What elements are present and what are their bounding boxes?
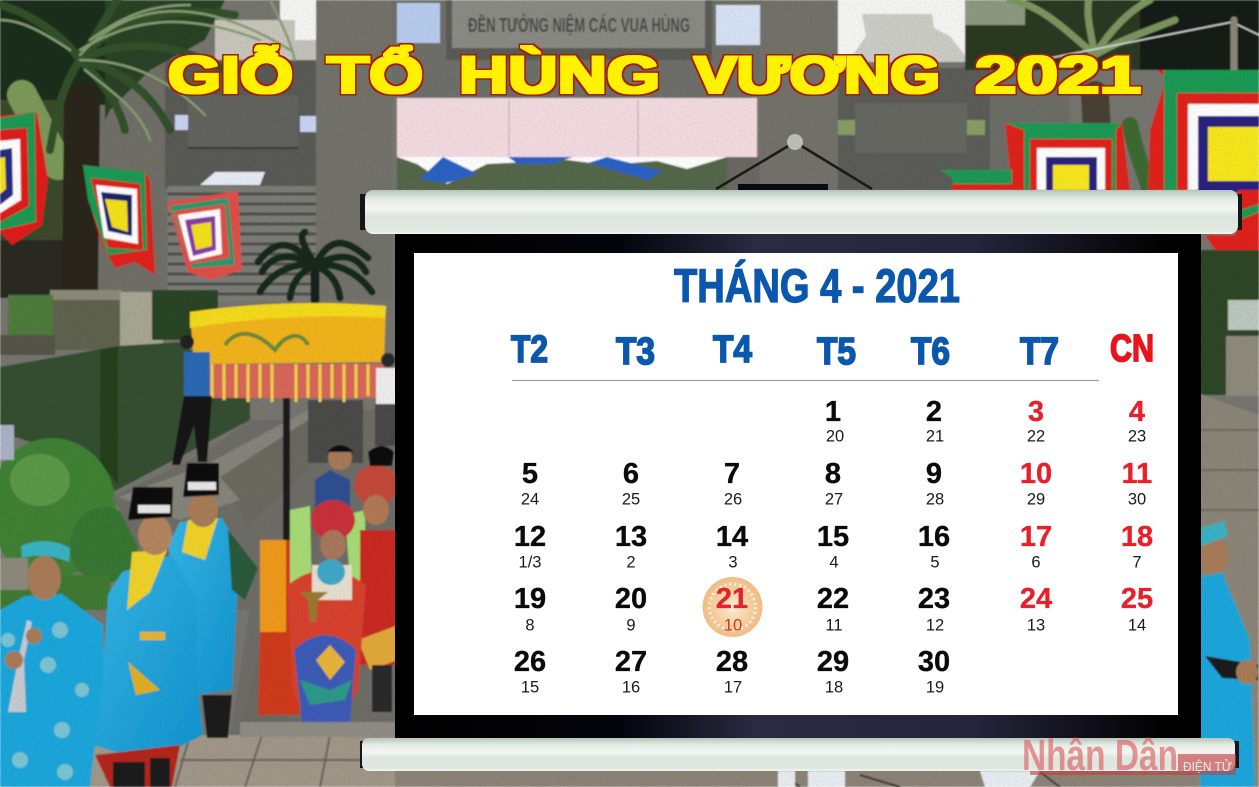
- weekday headers: T3: [616, 331, 655, 373]
- week 3: 12: [514, 521, 546, 553]
- week 1: 23: [1128, 428, 1146, 446]
- weekday headers: T2: [511, 329, 548, 371]
- right wall and garden: [1195, 250, 1259, 787]
- festival flags: [0, 70, 1259, 280]
- watermark: Nhân Dân điện tử: ĐIỆN TỬ: [1183, 759, 1232, 774]
- week 3: 5: [930, 554, 940, 572]
- weekday headers: T4: [713, 329, 752, 371]
- highlighted death anniversary date: 21: [716, 583, 748, 615]
- blue robed man, centre: [92, 487, 203, 787]
- weekday headers: T6: [911, 331, 950, 373]
- week 5: 28: [716, 646, 748, 678]
- week 3: 15: [817, 521, 849, 553]
- week 2: 29: [1027, 491, 1045, 509]
- week 4: 11: [825, 617, 843, 635]
- week 2: 24: [521, 491, 539, 509]
- week 1: 20: [826, 428, 844, 446]
- week 2: 28: [926, 491, 944, 509]
- calendar sheet: [414, 253, 1178, 715]
- week 1: 4: [1129, 396, 1145, 428]
- week 3: 7: [1132, 554, 1142, 572]
- week 5: 19: [926, 679, 944, 697]
- week 1: 21: [926, 428, 944, 446]
- flag right 3: [940, 170, 1012, 190]
- bottom roller: [360, 738, 1239, 771]
- week 5: 18: [825, 679, 843, 697]
- week 4: 8: [525, 617, 535, 635]
- week 4: 25: [1121, 583, 1153, 615]
- week 3: 1/3: [519, 554, 541, 572]
- month heading: THÁNG 4 - 2021: [674, 259, 960, 312]
- week 3: 16: [918, 521, 950, 553]
- day grid: [514, 396, 1153, 697]
- week 3: 4: [829, 554, 839, 572]
- week 3: 14: [716, 521, 748, 553]
- week 4: 23: [918, 583, 950, 615]
- week 4: 19: [514, 583, 546, 615]
- flag left 1: [0, 112, 48, 245]
- palm trees: [0, 0, 1259, 300]
- stone walkway: [0, 400, 1259, 787]
- weekday headers: T5: [817, 331, 856, 373]
- week 4: 20: [615, 583, 647, 615]
- week 2: 7: [724, 458, 740, 490]
- week 1: 1: [825, 396, 841, 428]
- week 2: 30: [1128, 491, 1146, 509]
- title: 2021: [975, 46, 1141, 105]
- sky: [280, 0, 968, 60]
- bystanders: [172, 335, 398, 465]
- week 3: 6: [1031, 554, 1041, 572]
- week 2: 6: [623, 458, 639, 490]
- hedge and garden: [0, 290, 250, 610]
- highlighted death anniversary date: [702, 577, 762, 637]
- week 5: 27: [615, 646, 647, 678]
- stairs: [168, 186, 316, 301]
- flutist in turquoise robe: [0, 541, 103, 787]
- week 2: 9: [926, 458, 942, 490]
- week 2: 10: [1020, 458, 1052, 490]
- week 2: 25: [622, 491, 640, 509]
- week 1: [825, 396, 1146, 446]
- week 3: 17: [1020, 521, 1052, 553]
- flag left 3: [167, 191, 242, 280]
- temple gate: ĐỀN TƯỞNG NIỆM CÁC VUA HÙNG: [468, 13, 690, 37]
- week 2: 5: [522, 458, 538, 490]
- week 2: [521, 458, 1152, 509]
- title: HÙNG: [459, 45, 660, 105]
- week 4: 9: [626, 617, 636, 635]
- week 4: 14: [1128, 617, 1146, 635]
- week 3: 18: [1121, 521, 1153, 553]
- blue robed man, back: [168, 463, 258, 738]
- flag left 2: [83, 165, 155, 275]
- title: GIỖ: [168, 44, 293, 105]
- hanger: [716, 134, 872, 191]
- week 4: 24: [1020, 583, 1052, 615]
- title: [168, 44, 1141, 105]
- highlighted death anniversary date: 10: [724, 617, 742, 635]
- week 4: 22: [817, 583, 849, 615]
- weekday headers: [511, 328, 1154, 373]
- title: TỔ: [327, 45, 423, 105]
- temple gate: [95, 0, 1070, 300]
- week 5: 30: [918, 646, 950, 678]
- week 5: 16: [622, 679, 640, 697]
- watermark: Nhân Dân điện tử: Nhân Dân: [1022, 731, 1178, 780]
- week 5: [514, 646, 950, 697]
- week 5: 17: [724, 679, 742, 697]
- man in blue at right: [778, 521, 1258, 787]
- title: VƯƠNG: [694, 46, 940, 105]
- week 4: 13: [1027, 617, 1045, 635]
- week 4: [514, 577, 1153, 637]
- week 4: 12: [926, 617, 944, 635]
- flag right 1: [1148, 70, 1259, 250]
- week 3: 13: [615, 521, 647, 553]
- weekday headers: CN: [1110, 328, 1154, 370]
- week 5: 26: [514, 646, 546, 678]
- week 2: 11: [1122, 458, 1152, 490]
- week 3: 2: [626, 554, 636, 572]
- royal parasol: [190, 303, 386, 590]
- week 1: 2: [926, 396, 942, 428]
- weekday headers: T7: [1020, 331, 1059, 373]
- week 2: 26: [724, 491, 742, 509]
- week 5: 29: [817, 646, 849, 678]
- week 3: 3: [728, 554, 738, 572]
- week 1: 22: [1027, 428, 1045, 446]
- calendar wall scroll: [360, 134, 1242, 771]
- week 3: [514, 521, 1153, 572]
- week 2: 27: [825, 491, 843, 509]
- top roller: [360, 190, 1242, 234]
- week 5: 15: [521, 679, 539, 697]
- week 2: 8: [825, 458, 841, 490]
- performers in red costume: [258, 445, 398, 722]
- dark frame: [395, 234, 1201, 738]
- flag right 2: [1005, 123, 1130, 190]
- week 1: 3: [1028, 396, 1044, 428]
